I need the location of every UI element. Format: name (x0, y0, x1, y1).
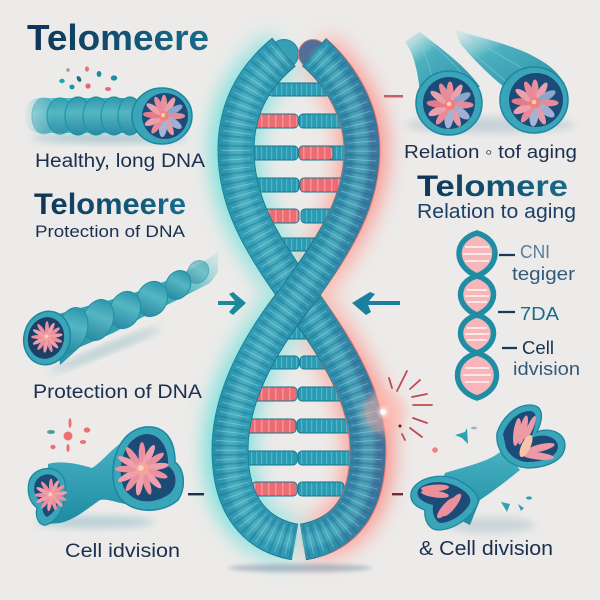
title: top left: Telomeere (27, 17, 209, 58)
mini helix label: division: idvision (513, 359, 580, 379)
particles near dividing telomere right (455, 427, 532, 512)
particles above healthy telomere (59, 66, 117, 91)
connector dashes: mini helix (498, 255, 517, 348)
tube: cell division right (411, 405, 565, 533)
label: cell division left: Cell idvision (65, 541, 180, 562)
ground shadow under helix (228, 564, 372, 572)
DNA double helix (230, 40, 368, 542)
mini helix (458, 233, 496, 398)
heading: telomere right: Telomere (417, 170, 568, 203)
label: cell division right: & Cell division (419, 538, 553, 560)
label: protection of DNA upper: Protection of DNA (35, 223, 185, 241)
label: protection of DNA lower: Protection of DNA (33, 382, 202, 403)
tube: cell division left (28, 427, 183, 528)
arrow: pointing right (218, 292, 246, 315)
base pair rungs (245, 83, 353, 496)
label: healthy long DNA: Healthy, long DNA (35, 151, 205, 172)
tube pair: relation to aging (405, 30, 575, 135)
label: relation to aging: Relation to aging (417, 201, 576, 223)
particles above dividing telomere left (47, 418, 90, 452)
connector dash top right (384, 95, 403, 98)
label: relation of aging: Relation ◦ tof aging (404, 142, 577, 162)
connector dash right (392, 493, 403, 495)
helix glow (230, 52, 368, 542)
damage burst (363, 371, 438, 453)
tube: healthy long DNA (25, 88, 192, 144)
mini helix label: 7DA: 7DA (520, 304, 559, 324)
connector dash left (188, 493, 204, 495)
heading: telomere left: Telomeere (34, 188, 186, 221)
mini helix label: tegiger: tegiger (512, 264, 575, 284)
back strand (236, 40, 368, 542)
mini helix label: Cell: Cell (522, 338, 554, 358)
front strand (230, 40, 362, 542)
mini helix label: CNI: CNI (520, 242, 550, 262)
arrow: pointing left (352, 292, 400, 315)
tube: protection of DNA (18, 252, 218, 376)
